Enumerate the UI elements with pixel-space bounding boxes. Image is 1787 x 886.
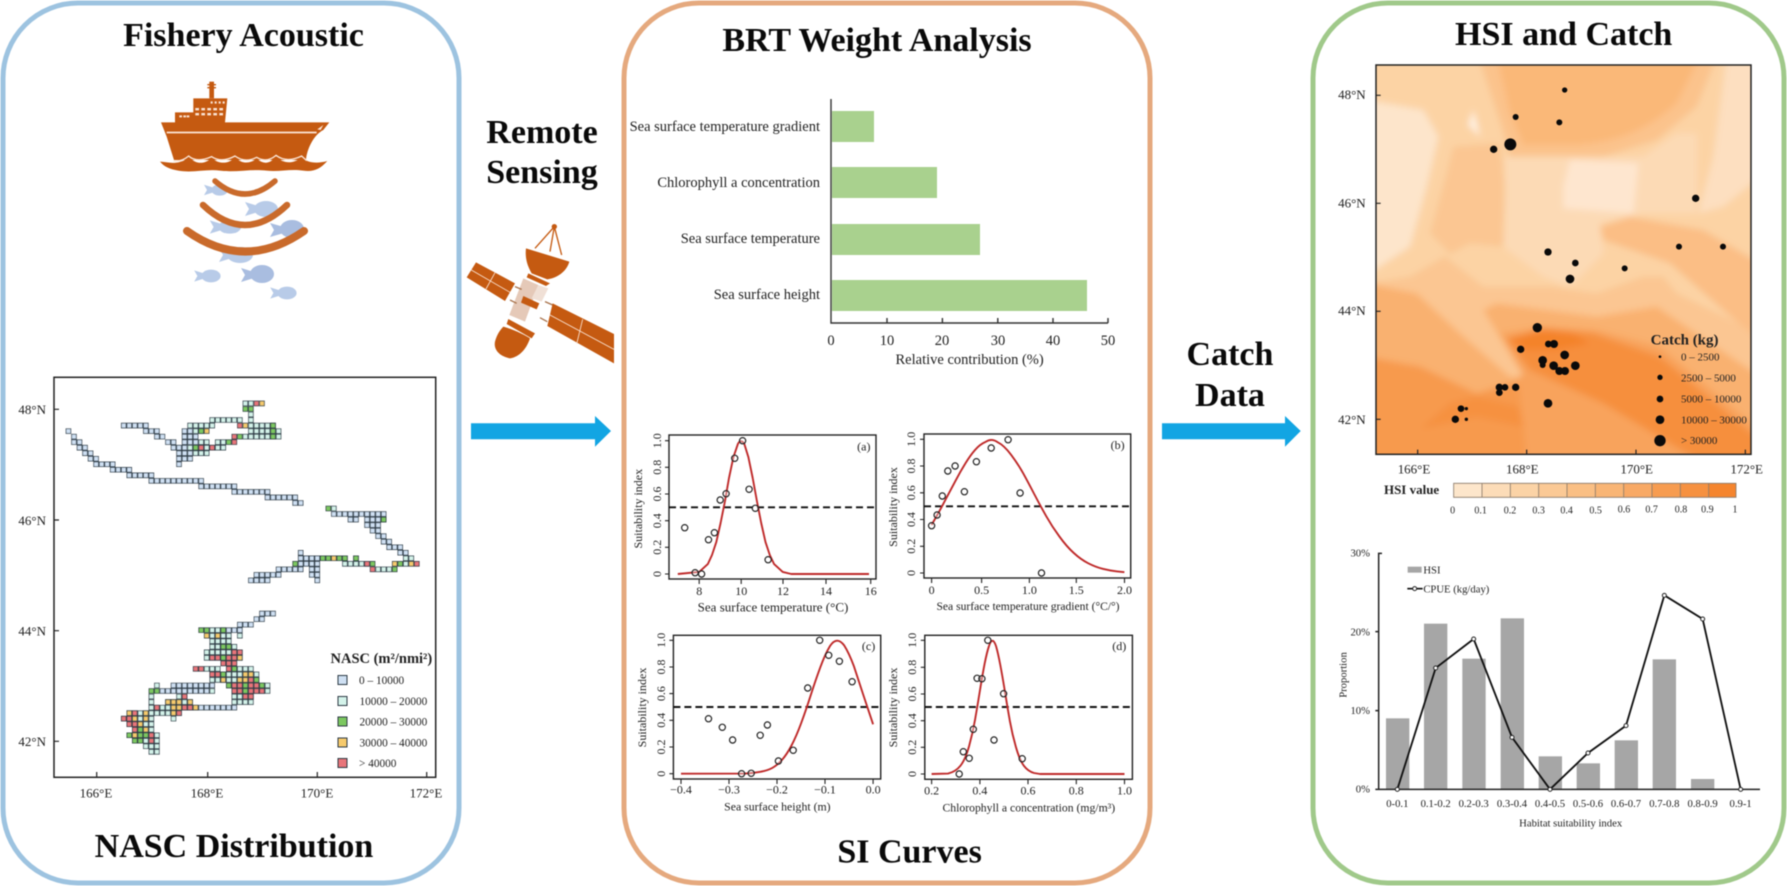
icon: sonar waves [187, 181, 304, 252]
map axis labels: 168°E [1506, 461, 1539, 476]
chart: HSI proportion and CPUE: 0.7-0.8 [1649, 799, 1679, 810]
legend: NASC classes [330, 651, 432, 770]
chart: HSI proportion and CPUE: 0.1-0.2 [1421, 799, 1451, 810]
chart: HSI proportion and CPUE: Habitat suitability index [1519, 819, 1623, 830]
chart: HSI proportion and CPUE: 30% [1350, 549, 1370, 560]
chart: SI curve (b): 0.2 [904, 539, 918, 554]
legend: HSI value colour bar: HSI value [1384, 482, 1439, 497]
chart: SI curve (b): 0 [929, 583, 935, 597]
legend: NASC classes: 0 – 10000 [359, 675, 405, 687]
legend: NASC classes: 10000 – 20000 [360, 696, 428, 708]
chart: SI curve (c): 0.0 [866, 782, 881, 796]
chart: relative contribution bars: Sea surface height [714, 287, 820, 303]
chart: SI curve (c): 0.4 [654, 713, 668, 728]
legend: HSI and CPUE [1407, 566, 1490, 595]
heading: Catch Data: Catch [1187, 336, 1274, 373]
chart: SI curve (d): 1.0 [905, 633, 919, 648]
heading: Remote Sensing [486, 114, 598, 191]
legend: HSI value colour bar: 0.5 [1589, 505, 1602, 516]
legend: HSI value colour bar: 0 [1450, 505, 1455, 516]
chart: SI curve (d): Suitability index [886, 668, 900, 747]
chart: SI curve (c): (c) [862, 639, 875, 653]
map axis labels: 170°E [1620, 461, 1653, 476]
chart: SI curve (d): 0 [905, 771, 919, 777]
legend: HSI value colour bar: 0.2 [1504, 505, 1516, 516]
chart: relative contribution bars [630, 99, 1115, 368]
chart: SI curve (b): (b) [1111, 438, 1125, 452]
chart: SI curve (c): 0.2 [654, 740, 668, 754]
arrow: to BRT panel [471, 416, 611, 447]
legend: NASC classes: 30000 – 40000 [360, 738, 428, 750]
chart: HSI map with catch points [1338, 47, 1770, 516]
legend: HSI value colour bar [1384, 482, 1737, 516]
map axis labels: 46°N [18, 513, 47, 528]
chart: relative contribution bars: Sea surface temperature [681, 231, 820, 247]
chart: SI curve (a): (a) [857, 440, 870, 454]
chart: SI curve (b): 0.4 [904, 512, 918, 527]
chart: SI curve (c): Sea surface height (m) [724, 800, 831, 814]
chart: SI curve (b): 0.5 [974, 583, 989, 597]
map axis labels: 166°E [80, 786, 112, 801]
chart: SI curve (d): 0.6 [1020, 784, 1036, 798]
chart: SI curve (a): 0.4 [650, 513, 664, 528]
chart: SI curve (c): 0.6 [654, 686, 668, 701]
chart: SI curve (b): Sea surface temperature gradient (°C/°) [936, 600, 1120, 613]
chart: SI curve (b): 0.6 [904, 485, 918, 500]
map axis labels: 42°N [1338, 412, 1366, 427]
chart: relative contribution bars: Sea surface temperature gradient [630, 119, 820, 135]
chart: HSI proportion and CPUE: 0.2-0.3 [1459, 799, 1489, 810]
chart: SI curve (a): 1.0 [650, 433, 664, 448]
chart: HSI proportion and CPUE: 0.5-0.6 [1573, 799, 1604, 810]
chart: SI curve (a): 12 [777, 584, 789, 598]
heading: NASC Distribution: NASC Distribution [95, 828, 373, 865]
chart: HSI proportion and CPUE: 0.3-0.4 [1497, 799, 1528, 810]
map axis labels [18, 402, 442, 801]
icon: fishing vessel [160, 82, 329, 172]
legend: NASC classes: 20000 – 30000 [360, 717, 428, 729]
legend: HSI value colour bar: 1 [1732, 505, 1737, 516]
panel: BRT weight analysis and SI curves [624, 3, 1150, 883]
chart: SI curve (d) [886, 633, 1132, 815]
panel: HSI and catch [1313, 3, 1784, 883]
chart: HSI proportion and CPUE: 0% [1356, 785, 1370, 796]
legend: HSI value colour bar: 0.9 [1701, 505, 1714, 516]
chart: HSI proportion and CPUE [1339, 549, 1760, 830]
map axis labels: 48°N [1338, 87, 1366, 102]
chart: HSI proportion and CPUE: 10% [1350, 706, 1370, 717]
chart: SI curve (a) [631, 433, 877, 615]
chart: SI curve (b): Suitability index [886, 467, 900, 547]
chart: SI curve (d): 0.4 [905, 713, 919, 728]
chart: SI curve (a): 0 [650, 571, 664, 577]
map axis labels: 48°N [18, 402, 47, 417]
map axis labels: 166°E [1398, 461, 1430, 476]
legend: HSI value colour bar: 0.8 [1675, 505, 1687, 516]
icon: fish school [194, 184, 304, 299]
chart: SI curve (a): 14 [820, 584, 832, 598]
chart: HSI proportion and CPUE: 0.8-0.9 [1688, 799, 1718, 810]
heading: Remote Sensing: Sensing [486, 154, 598, 191]
chart: relative contribution bars: 30 [991, 333, 1005, 349]
chart: SI curve (c): −0.1 [814, 782, 836, 796]
chart: SI curve (a): 16 [865, 584, 877, 598]
map axis labels: 170°E [301, 786, 333, 801]
chart: SI curve (c) [635, 633, 881, 814]
chart: HSI proportion and CPUE: 0.6-0.7 [1611, 799, 1642, 810]
chart: HSI proportion and CPUE: Proportion [1339, 652, 1350, 698]
heading: Remote Sensing: Remote [486, 114, 598, 151]
chart: SI curve (b): 1.0 [1022, 583, 1037, 597]
chart: relative contribution bars: 10 [880, 333, 894, 349]
chart: SI curve (c): 1.0 [654, 633, 668, 648]
arrow: to HSI panel [1162, 416, 1301, 447]
chart: SI curve (b): 1.0 [904, 432, 918, 447]
chart: SI curve (b) [886, 432, 1132, 613]
chart: SI curve (d): 0.2 [924, 784, 939, 798]
chart: relative contribution bars: 50 [1101, 333, 1115, 349]
legend: HSI value colour bar: 0.7 [1645, 505, 1658, 516]
panel: fishery acoustic [3, 3, 459, 883]
legend: HSI and CPUE: HSI [1423, 566, 1441, 577]
chart: SI curve (a): Suitability index [631, 469, 645, 549]
map axis labels: 42°N [18, 734, 47, 749]
chart: SI curve (a): 0.2 [650, 540, 664, 555]
icon: satellite [467, 224, 614, 363]
chart: SI curve (d): 0.2 [905, 740, 919, 755]
map axis labels [1338, 87, 1763, 476]
chart: HSI proportion and CPUE: 0.9-1 [1730, 799, 1752, 810]
chart: SI curve (a): 0.8 [650, 460, 664, 475]
chart: SI curve (c): Suitability index [635, 668, 649, 747]
catch points [1452, 87, 1726, 423]
heading: Fishery Acoustic: Fishery Acoustic [123, 17, 364, 54]
legend: catch size [1651, 332, 1747, 447]
chart: SI curve (c): 0.8 [654, 660, 668, 674]
map axis labels: 172°E [410, 786, 442, 801]
chart: SI curve (b): 1.5 [1069, 583, 1084, 597]
legend: catch size: > 30000 [1681, 435, 1718, 447]
legend: catch size: 2500 – 5000 [1681, 373, 1736, 385]
map axis labels: 172°E [1730, 461, 1763, 476]
legend: HSI and CPUE: CPUE (kg/day) [1423, 584, 1490, 595]
chart: SI curve (b): 2.0 [1117, 583, 1132, 597]
chart: SI curve (c): −0.4 [670, 782, 692, 796]
chart: SI curve (d): 0.8 [1069, 784, 1084, 798]
chart: relative contribution bars: 20 [935, 333, 949, 349]
map axis labels: 44°N [1338, 303, 1366, 318]
chart: HSI proportion and CPUE: 0.4-0.5 [1535, 799, 1565, 810]
map cells [66, 401, 420, 755]
chart: SI curve (d): 0.4 [972, 784, 987, 798]
chart: SI curve (c): −0.3 [718, 782, 740, 796]
heading: HSI and Catch: HSI and Catch [1455, 16, 1672, 53]
legend: HSI value colour bar: 0.1 [1474, 505, 1487, 516]
heading: Catch Data: Data [1195, 377, 1265, 414]
chart: NASC distribution map [18, 377, 442, 801]
legend: HSI value colour bar: 0.6 [1618, 505, 1630, 516]
legend: NASC classes: > 40000 [359, 758, 397, 770]
legend: catch size: 0 – 2500 [1681, 352, 1720, 364]
chart: SI curve (a): 10 [735, 584, 747, 598]
heading: Catch Data [1187, 336, 1274, 414]
chart: relative contribution bars: Chlorophyll a concentration [657, 175, 821, 191]
chart: HSI proportion and CPUE: 0-0.1 [1386, 799, 1408, 810]
chart: HSI proportion and CPUE: 20% [1350, 627, 1370, 638]
map axis labels: 168°E [191, 786, 223, 801]
chart: SI curve (d): 0.8 [905, 660, 919, 675]
legend: HSI value colour bar: 0.3 [1532, 505, 1545, 516]
chart: SI curve (d): Chlorophyll a concentration (mg/m³) [942, 802, 1115, 815]
legend: HSI value colour bar: 0.4 [1560, 505, 1573, 516]
map axis labels: 44°N [18, 624, 47, 639]
chart: SI curve (c): 0 [654, 771, 668, 777]
chart: SI curve (d): 1.0 [1117, 784, 1132, 798]
chart: relative contribution bars: 40 [1046, 333, 1060, 349]
legend: catch size: 5000 – 10000 [1681, 394, 1742, 406]
chart: relative contribution bars: Relative contribution (%) [896, 352, 1044, 368]
chart: SI curve (c): −0.2 [766, 782, 788, 796]
heading: SI Curves: SI Curves [837, 834, 982, 871]
chart: SI curve (b): 0 [904, 570, 918, 576]
chart: relative contribution bars: 0 [827, 333, 835, 349]
chart: SI curve (b): 0.8 [904, 458, 918, 474]
chart: SI curve (d): 0.6 [905, 686, 919, 702]
legend: catch size: Catch (kg) [1651, 332, 1719, 348]
legend: NASC classes: NASC (m²/nmi²) [330, 651, 432, 667]
chart: SI curve (a): 0.6 [650, 486, 664, 502]
chart: SI curve (a): Sea surface temperature (°C) [698, 600, 848, 615]
chart: SI curve (a): 8 [696, 584, 702, 598]
legend: catch size: 10000 – 30000 [1681, 414, 1747, 426]
map axis labels: 46°N [1338, 195, 1366, 210]
heading: BRT Weight Analysis: BRT Weight Analysis [722, 22, 1032, 59]
chart: SI curve (d): (d) [1112, 639, 1126, 653]
